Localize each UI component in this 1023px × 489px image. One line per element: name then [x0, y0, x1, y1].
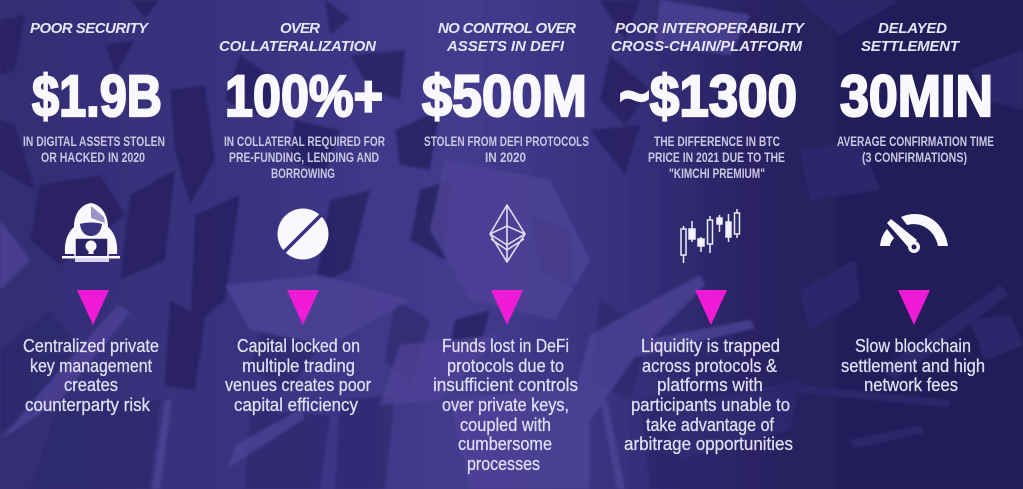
stat description: OR HACKED IN 2020 [41, 150, 145, 165]
heading: OVER [280, 20, 320, 37]
big number: $1.9B [32, 64, 162, 129]
heading: POOR INTEROPERABILITY [615, 20, 806, 37]
heading: NO CONTROL OVER [438, 20, 576, 37]
big number: ~$1300 [619, 64, 797, 129]
stat description [424, 134, 589, 165]
problem description [841, 336, 985, 395]
heading [219, 20, 377, 55]
problem description: counterparty risk [25, 395, 151, 415]
column 4: poor interoperability [611, 20, 806, 454]
problem description: insufficient controls [433, 375, 578, 395]
problem description: participants unable to [631, 395, 790, 415]
big number: 100%+ [225, 64, 383, 129]
stat description: IN COLLATERAL REQUIRED FOR [224, 134, 385, 149]
heading: DELAYED [878, 20, 947, 37]
problem description: settlement and high [841, 356, 985, 376]
problem description: Capital locked on [237, 336, 360, 356]
stat description: STOLEN FROM DEFI PROTOCOLS [424, 134, 589, 149]
stat description [224, 134, 385, 181]
heading: ASSETS IN DEFI [446, 38, 565, 55]
stat description: BORROWING [271, 166, 335, 181]
icon: slashed circle [278, 208, 328, 260]
problem description: creates [64, 375, 118, 395]
stat description [837, 134, 994, 165]
problem description: network fees [864, 375, 958, 395]
problem description: Liquidity is trapped [641, 336, 780, 356]
heading [438, 20, 576, 55]
problem description [433, 336, 578, 474]
big number: $500M [422, 64, 587, 129]
icon: hooded hacker with laptop [62, 203, 120, 262]
stat description: PRE-FUNDING, LENDING AND [229, 150, 379, 165]
problem description: across protocols & [642, 356, 777, 376]
icon: ethereum diamond [490, 205, 525, 262]
problem description: Funds lost in DeFi [442, 336, 569, 356]
column 3: no control over assets [422, 20, 589, 474]
big number: 30MIN [840, 64, 993, 129]
arrow: pink triangle [287, 290, 319, 325]
column 1: poor security [23, 20, 165, 415]
stat description [23, 134, 165, 165]
column 2: over collateralization [219, 20, 385, 415]
icon: candlestick chart [681, 209, 740, 263]
stat description: (3 CONFIRMATIONS) [862, 150, 967, 165]
arrow: pink triangle [77, 290, 109, 325]
heading [861, 20, 961, 55]
problem description: processes [467, 454, 540, 474]
problem description [225, 336, 371, 415]
heading: CROSS-CHAIN/PLATFORM [611, 38, 802, 55]
problem description: key management [30, 356, 152, 376]
column 5: delayed settlement [837, 20, 994, 395]
stat description: "KIMCHI PREMIUM" [669, 166, 765, 181]
stat description [648, 134, 785, 181]
problem description: platforms with [657, 375, 763, 395]
heading: SETTLEMENT [861, 38, 961, 55]
heading: COLLATERALIZATION [219, 38, 377, 55]
stat description: THE DIFFERENCE IN BTC [654, 134, 780, 149]
problem description: coupled with [460, 415, 551, 435]
problem description: take advantage of [646, 415, 775, 435]
problem description: capital efficiency [234, 395, 358, 415]
problem description: protocols due to [447, 356, 564, 376]
problem description: Centralized private [23, 336, 159, 356]
problem description: venues creates poor [225, 375, 371, 395]
icon: speedometer gauge [880, 214, 948, 253]
problem description: Slow blockchain [855, 336, 971, 356]
stat description: PRICE IN 2021 DUE TO THE [648, 150, 785, 165]
arrow: pink triangle [491, 290, 523, 325]
stat description: IN DIGITAL ASSETS STOLEN [23, 134, 165, 149]
problem description: over private keys, [442, 395, 569, 415]
arrow: pink triangle [695, 290, 727, 325]
stat description: IN 2020 [485, 150, 526, 165]
problem description [624, 336, 793, 454]
problem description: cumbersome [458, 434, 552, 454]
problem description [23, 336, 159, 415]
problem description: arbitrage opportunities [624, 434, 793, 454]
problem description: multiple trading [242, 356, 355, 376]
heading: POOR SECURITY [30, 20, 150, 37]
heading [611, 20, 806, 55]
arrow: pink triangle [898, 290, 930, 325]
